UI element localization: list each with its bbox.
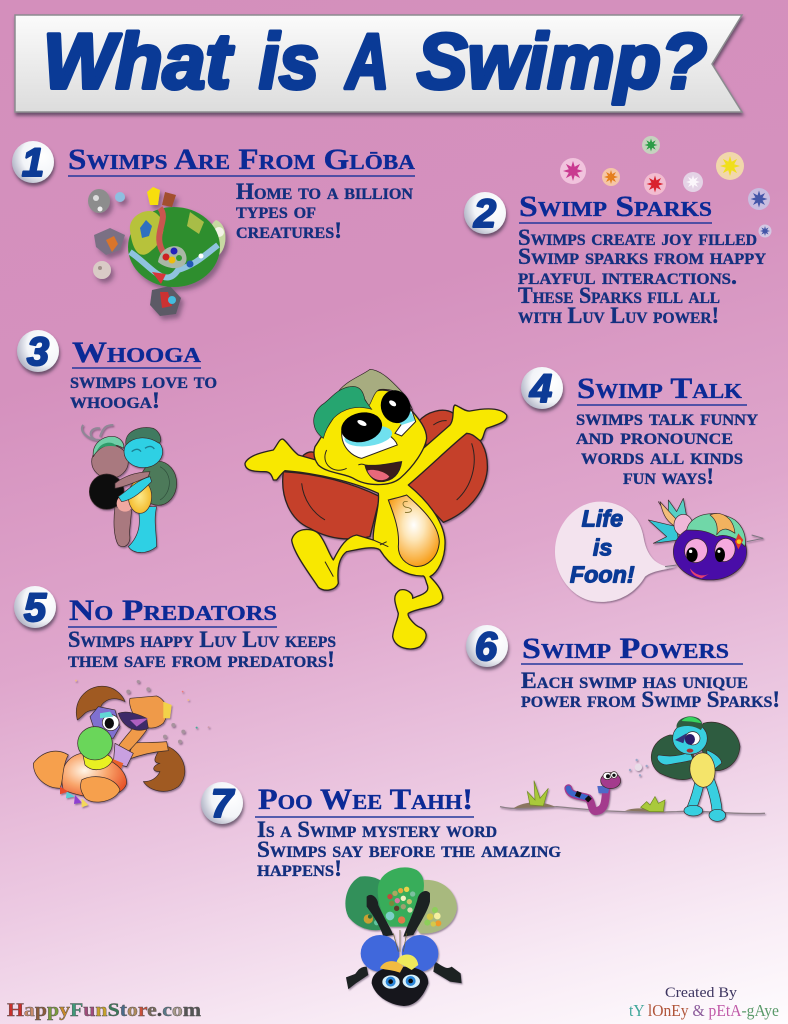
text 4: fun ways! <box>623 464 714 489</box>
head <box>314 390 427 485</box>
footer: credits: Created By <box>665 985 738 1001</box>
badge 6: 6 <box>475 625 498 669</box>
text 3 <box>70 368 217 413</box>
text 7: Is a Swimp mystery word <box>257 817 497 842</box>
icon: swimp sparks <box>560 136 772 238</box>
icon: planet Globa <box>88 187 225 316</box>
text 7: happens! <box>257 856 342 881</box>
text 1: creatures! <box>236 218 342 243</box>
hair <box>336 369 413 410</box>
text 5: them safe from predators! <box>68 647 335 672</box>
belly <box>388 495 439 567</box>
badge 1: 1 <box>22 141 44 185</box>
section 5: No Predators <box>14 586 336 672</box>
speech bubble <box>555 502 677 602</box>
text 2: Swimps create joy filled <box>518 225 757 250</box>
heading 4: Swimp Talk <box>577 372 743 405</box>
text 4: words all kinds <box>581 444 743 469</box>
eyes <box>342 428 397 458</box>
text 6: power from Swimp Sparks! <box>521 687 780 712</box>
mouth <box>365 462 402 482</box>
badge 2: 2 <box>473 192 496 236</box>
badge 5: 5 <box>24 586 47 630</box>
text 4: and pronounce <box>576 424 733 449</box>
footer: credits: tY lOnEy & pEtA-gAye <box>629 1001 779 1020</box>
text 6 <box>521 668 780 712</box>
section 3: Whooga <box>17 330 217 413</box>
text 3: whooga! <box>70 388 160 413</box>
bubble text: Foon! <box>570 562 635 588</box>
text 2: Swimp sparks from happy <box>518 244 766 269</box>
text 2: These Sparks fill all <box>518 283 720 308</box>
text 1: Home to a billion <box>236 179 413 204</box>
badge 1 <box>12 141 54 185</box>
title <box>43 17 707 105</box>
heading 6: Swimp Powers <box>522 632 729 665</box>
heading 5: No Predators <box>69 594 277 627</box>
title: is <box>259 17 319 105</box>
title banner <box>15 15 742 112</box>
footer: website: HappyFunStore.com <box>7 1000 201 1021</box>
body and limbs <box>245 405 507 649</box>
section 4: Swimp Talk <box>521 367 758 489</box>
spark <box>629 759 648 776</box>
text 5: Swimps happy Luv Luv keeps <box>68 627 336 652</box>
section 1: Swimps Are From Globa <box>12 141 416 243</box>
section 6: Swimp Powers <box>466 625 780 712</box>
illustration: ground, grass and worm <box>500 759 765 814</box>
text 1: types of <box>236 198 316 223</box>
character: teal swimp with dark wings <box>651 716 740 821</box>
bubble text: Life <box>582 506 623 532</box>
heading 7: Poo Wee Tahh! <box>258 783 473 816</box>
heading 2: Swimp Sparks <box>519 190 712 223</box>
text 4 <box>576 405 758 489</box>
text 7 <box>257 817 562 881</box>
badge 2 <box>464 192 506 236</box>
text 2: with Luv Luv power! <box>518 303 719 328</box>
text 4: swimps talk funny <box>576 405 758 430</box>
title: Swimp? <box>417 17 707 105</box>
text 2 <box>518 225 766 328</box>
character: two swimps hugging <box>82 425 177 553</box>
badge 4 <box>521 367 563 411</box>
character: upside-down swimp <box>345 867 462 1006</box>
badge 5 <box>14 586 56 630</box>
heading 1: Swimps Are From Glōba <box>68 143 416 176</box>
text 5 <box>68 627 336 672</box>
title: A <box>344 17 389 105</box>
text 1 <box>236 179 413 243</box>
badge 3: 3 <box>27 330 49 374</box>
badge 6 <box>466 625 508 669</box>
title: What <box>43 17 234 105</box>
section 7: Poo Wee Tahh! <box>201 782 562 881</box>
wings <box>283 410 487 539</box>
text 7: Swimps say before the amazing <box>257 837 562 862</box>
badge 3 <box>17 330 59 374</box>
worm <box>568 787 607 811</box>
character: playful swimps <box>33 680 210 807</box>
bubble text <box>570 506 635 588</box>
character: purple swimp head <box>648 498 763 580</box>
bubble text: is <box>593 535 612 561</box>
text 6: Each swimp has unique <box>521 668 748 693</box>
section 2: Swimp Sparks <box>464 190 766 328</box>
main swimp character <box>245 369 507 649</box>
heading 3: Whooga <box>72 336 202 369</box>
badge 7: 7 <box>211 782 235 826</box>
badge 7 <box>201 782 243 826</box>
badge 4: 4 <box>529 367 552 411</box>
text 3: swimps love to <box>70 368 217 393</box>
text 2: playful interactions. <box>518 264 737 289</box>
footer: credits <box>629 985 779 1020</box>
